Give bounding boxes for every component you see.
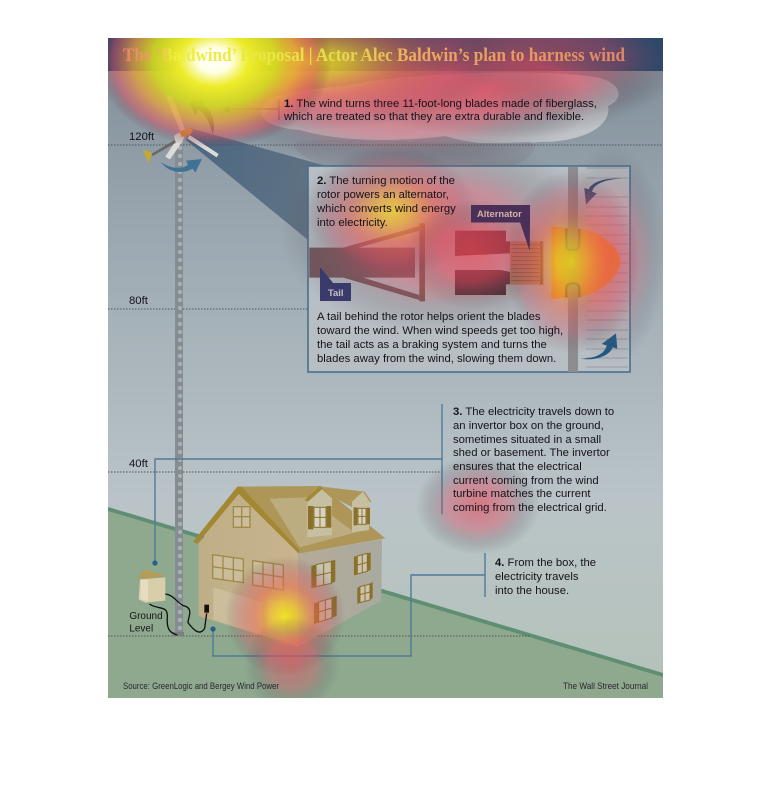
height labels: 80ft (129, 295, 149, 307)
text: step 4: electricity travels (495, 571, 579, 583)
connector: step 3 (152, 404, 442, 566)
text: tail explanation (317, 311, 563, 365)
text: step 3: current coming from the wind (453, 475, 599, 487)
arrow: top wind rotation (584, 178, 622, 205)
text: step 3: shed or basement. The invertor (453, 447, 610, 459)
text: tail explanation: toward the wind. When wind speeds get too high, (317, 325, 563, 337)
text: step 4 (495, 558, 596, 594)
connector: step 4 (210, 553, 485, 656)
text: step 4: 4. From the box, the (495, 557, 596, 569)
alternator (455, 231, 510, 256)
windows (213, 507, 283, 590)
label: tail (320, 267, 351, 301)
text: step 1: which are treated so that they are extra durable and flexible. (283, 111, 584, 123)
rotor hub (551, 227, 620, 299)
inverter box and cable: Level (129, 623, 153, 634)
height labels: 120ft (129, 131, 155, 143)
source credit: Source: GreenLogic and Bergey Wind Power (123, 680, 279, 691)
text: step 4: into the house. (495, 585, 569, 597)
text: step 3: an invertor box on the ground, (453, 420, 604, 432)
tower (173, 145, 184, 636)
header bar (108, 38, 663, 71)
ground (108, 507, 663, 698)
text: step 2: 2. The turning motion of the (317, 175, 455, 187)
arrow: yaw rotation (161, 159, 202, 173)
arrow: bottom wind rotation (580, 333, 617, 359)
text: step 3: ensures that the electrical (453, 461, 582, 473)
publisher credit: The Wall Street Journal (563, 680, 648, 691)
connector: step 1 (224, 99, 279, 120)
text: tail explanation: the tail acts as a braking system and turns the (317, 339, 547, 351)
text: step 2: rotor powers an alternator, (317, 189, 449, 201)
text: step 3: turbine matches the current (453, 488, 591, 500)
text: step 3: 3. The electricity travels down to (453, 406, 614, 418)
height labels: 40ft (129, 458, 149, 470)
garage doors (213, 587, 261, 635)
height labels (129, 131, 155, 470)
heatmap overlay (108, 38, 663, 698)
text: step 2: into electricity. (317, 217, 388, 229)
label: tail: Tail (328, 287, 343, 298)
clouds (261, 72, 619, 168)
panel: illustration background (108, 38, 663, 698)
text: step 3: sometimes situated in a small (453, 434, 601, 446)
house (193, 486, 385, 647)
mast (568, 167, 578, 372)
text: step 1 (283, 98, 597, 123)
height guide lines (108, 145, 663, 636)
header title: The ‘Baldwind’ Proposal | Actor Alec Baldwin’s plan to harness wind (123, 46, 626, 66)
text: step 3 (453, 406, 614, 514)
arrow: blade rotation up (192, 106, 214, 134)
tail (309, 226, 419, 300)
text: step 2: which converts wind energy (316, 203, 456, 215)
text: step 2 (316, 175, 456, 229)
wind turbine (143, 94, 219, 173)
inverter box and cable: Ground (129, 611, 163, 622)
beam from rotor to detail panel (186, 128, 330, 240)
text: step 3: coming from the electrical grid. (453, 502, 607, 514)
text: tail explanation: blades away from the wind, slowing them down. (317, 353, 556, 365)
dormers (305, 487, 371, 537)
detail panel 2 (308, 166, 630, 372)
inverter box and cable (129, 569, 209, 635)
label: alternator (471, 205, 530, 251)
wind lines (586, 168, 628, 367)
text: tail explanation: A tail behind the rotor helps orient the blades (317, 311, 541, 323)
label: alternator: Alternator (477, 208, 522, 219)
text: step 1: 1. The wind turns three 11-foot-long blades made of fiberglass, (284, 98, 597, 110)
